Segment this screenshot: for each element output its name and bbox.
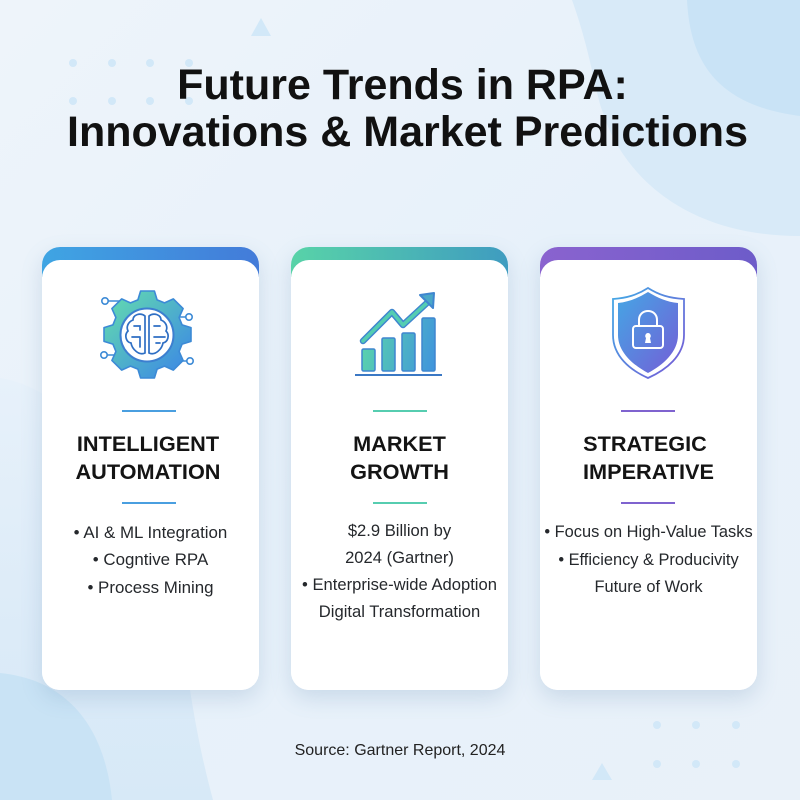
heading [76, 431, 220, 484]
panel: intelligent automation [42, 247, 259, 690]
icon: gear with brain [100, 290, 194, 379]
heading: MARKET [353, 431, 446, 456]
icon: shield with padlock [612, 287, 685, 379]
bullet list: • Cogntive RPA [93, 550, 208, 569]
card header band [540, 247, 757, 277]
title: Innovations & Market Predictions [67, 108, 748, 156]
divider [122, 410, 176, 412]
bullet list: • Process Mining [87, 578, 214, 596]
strategic bullets: • Efficiency & Producivity [558, 550, 739, 568]
source note: Source: Gartner Report, 2024 [295, 742, 505, 759]
market bullets: • Enterprise-wide Adoption [302, 575, 497, 594]
market bullets [302, 521, 497, 621]
market bullets: Digital Transformation [319, 602, 480, 621]
heading: AUTOMATION [76, 459, 220, 484]
divider [621, 502, 675, 504]
icon: bar chart with rising arrow [355, 292, 442, 376]
market bullets: 2024 (Gartner) [345, 548, 454, 567]
card header band [291, 247, 508, 277]
divider [373, 502, 427, 504]
divider [621, 410, 675, 412]
heading [583, 431, 714, 484]
heading [350, 431, 449, 484]
bullet list [74, 522, 227, 596]
market bullets: $2.9 Billion by [348, 521, 451, 540]
heading: STRATEGIC [583, 431, 707, 456]
bullet list: • AI & ML Integration [74, 522, 227, 542]
heading: INTELLIGENT [77, 431, 219, 456]
panel: market growth [291, 247, 508, 690]
card header band [42, 247, 259, 277]
divider [122, 502, 176, 504]
strategic bullets [544, 523, 753, 596]
strategic bullets: Future of Work [594, 578, 703, 596]
title [67, 61, 748, 156]
title: Future Trends in RPA: [177, 61, 628, 109]
panel: strategic imperative [540, 247, 757, 690]
heading: IMPERATIVE [583, 459, 714, 484]
strategic bullets: • Focus on High-Value Tasks [544, 523, 753, 541]
divider [373, 410, 427, 412]
heading: GROWTH [350, 459, 449, 484]
